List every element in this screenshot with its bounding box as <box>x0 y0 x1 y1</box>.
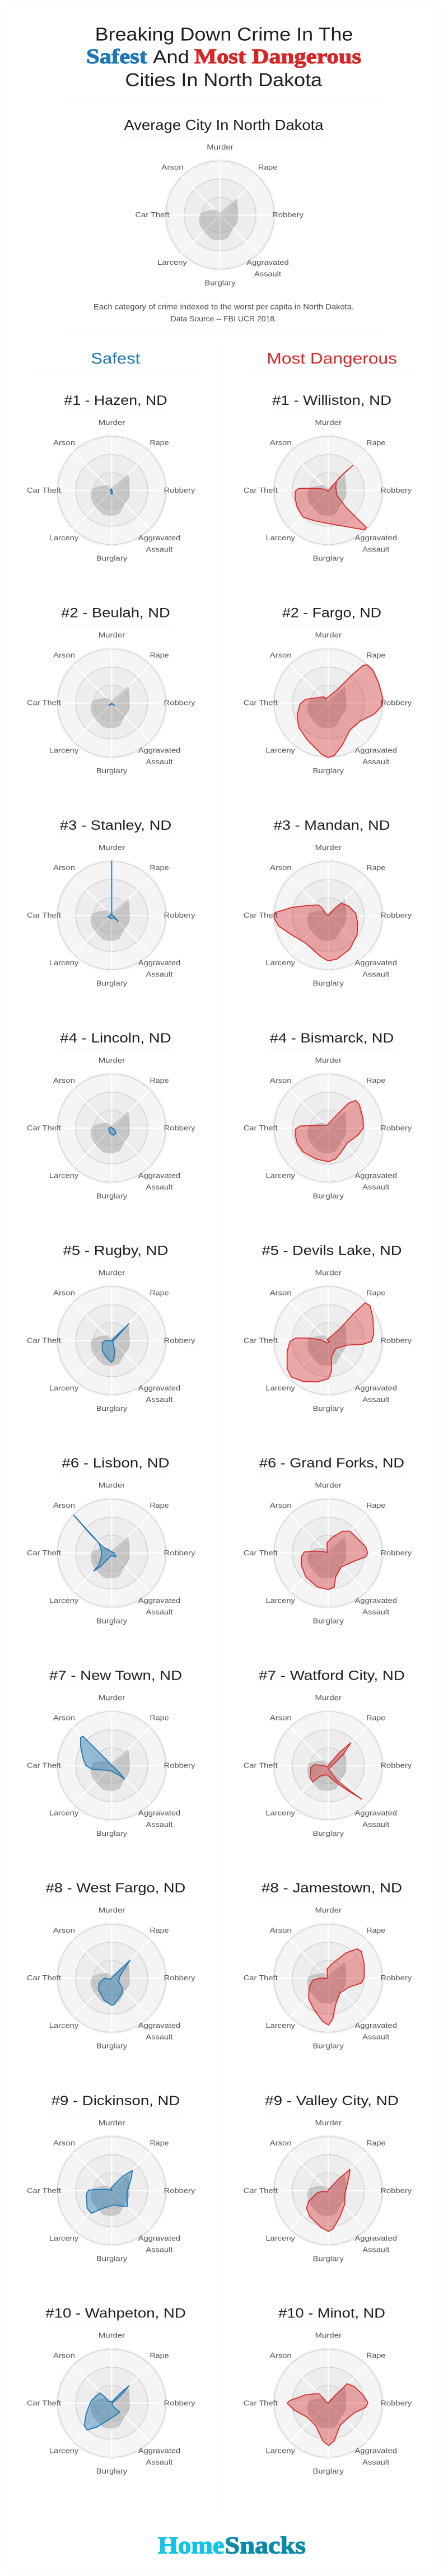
radar chart: Minot: Car Theft <box>244 2399 278 2407</box>
radar chart: Mandan <box>244 844 412 988</box>
radar chart: Devils Lake: Rape <box>366 1289 385 1297</box>
heading: Dickinson: #9 - Dickinson, ND <box>52 2093 180 2109</box>
radar chart: Devils Lake: Aggravated <box>354 1384 397 1392</box>
radar chart: Rugby: Robbery <box>164 1336 195 1344</box>
radar chart: Stanley <box>27 844 195 988</box>
radar chart: Jamestown <box>244 1906 412 2050</box>
radar chart: Williston: Murder <box>315 419 342 427</box>
radar chart: Wahpeton: Arson <box>53 2351 75 2359</box>
title: And <box>153 47 189 68</box>
heading: Lincoln: #4 - Lincoln, ND <box>60 1031 171 1046</box>
radar chart: Rugby: Rape <box>150 1289 169 1297</box>
radar chart: Fargo: Larceny <box>265 747 296 755</box>
radar chart: Beulah: Arson <box>53 652 75 660</box>
radar chart: Beulah: Burglary <box>96 767 128 775</box>
radar chart: New Town: Murder <box>99 1694 125 1702</box>
title: Most Dangerous <box>194 45 361 68</box>
radar chart: Dickinson: Arson <box>53 2139 75 2147</box>
radar chart: Devils Lake <box>244 1269 412 1413</box>
radar chart: Hazen: Aggravated <box>138 534 180 542</box>
radar chart: Fargo: Arson <box>270 652 292 660</box>
radar chart: Grand Forks: Assault <box>362 1608 390 1616</box>
radar chart: Bismarck: Arson <box>270 1077 292 1084</box>
radar chart: Grand Forks: Car Theft <box>244 1549 278 1557</box>
radar chart: Grand Forks: Burglary <box>312 1617 344 1625</box>
radar chart: Dickinson: Aggravated <box>138 2234 180 2242</box>
radar chart: Williston: Car Theft <box>244 487 278 494</box>
radar chart: Hazen: Rape <box>150 439 169 447</box>
radar chart: Watford City <box>244 1694 412 1838</box>
radar chart: Minot <box>244 2331 412 2475</box>
panel: #6 Grand Forks <box>244 1456 412 1625</box>
radar chart: Devils Lake: Arson <box>270 1289 292 1297</box>
radar chart: Mandan: Rape <box>366 864 385 872</box>
radar chart: Stanley: Murder <box>99 844 125 852</box>
radar chart: Dickinson: Assault <box>146 2246 173 2254</box>
radar chart: Beulah: Robbery <box>164 699 195 707</box>
radar chart: average city: Assault <box>254 270 282 278</box>
heading: Beulah: #2 - Beulah, ND <box>61 606 170 621</box>
radar chart: Hazen <box>27 419 195 562</box>
radar chart: Beulah <box>27 632 195 775</box>
radar chart: Devils Lake: Car Theft <box>244 1336 278 1344</box>
heading: New Town: #7 - New Town, ND <box>49 1668 182 1684</box>
radar chart: Wahpeton: Larceny <box>49 2447 79 2455</box>
radar chart: Rugby: Assault <box>146 1396 173 1404</box>
radar chart: Wahpeton: Aggravated <box>138 2447 180 2455</box>
radar chart: West Fargo: Murder <box>99 1906 125 1914</box>
radar chart: West Fargo: Arson <box>53 1927 75 1934</box>
radar chart: Minot: Murder <box>315 2331 342 2339</box>
radar chart: Beulah: Rape <box>150 652 169 660</box>
panel: #7 Watford City <box>244 1668 412 1838</box>
radar chart: New Town: Car Theft <box>27 1762 62 1770</box>
note: data source <box>94 302 354 323</box>
radar chart: Bismarck <box>244 1056 412 1200</box>
heading: Grand Forks: #6 - Grand Forks, ND <box>259 1456 404 1471</box>
radar chart: Watford City: Assault <box>362 1821 390 1829</box>
radar chart: Hazen: Car Theft <box>27 487 62 494</box>
heading: Watford City: #7 - Watford City, ND <box>259 1668 405 1684</box>
radar chart: Mandan: Assault <box>362 971 390 979</box>
radar chart: Fargo: Robbery <box>380 699 412 707</box>
panel: #4 Lincoln <box>27 1031 195 1200</box>
radar chart: average city: Burglary <box>204 279 236 287</box>
radar chart: Minot: Robbery <box>380 2399 412 2407</box>
radar chart: West Fargo: Rape <box>150 1927 169 1934</box>
radar chart: Watford City: Larceny <box>265 1810 296 1817</box>
radar chart: Dickinson <box>27 2119 195 2262</box>
radar chart: Valley City: Car Theft <box>244 2187 278 2195</box>
radar chart: Minot: Larceny <box>265 2447 296 2455</box>
radar chart: Grand Forks: Robbery <box>380 1549 412 1557</box>
radar chart: Lisbon <box>27 1481 195 1625</box>
heading: Fargo: #2 - Fargo, ND <box>282 606 381 621</box>
radar chart: Lincoln: Murder <box>99 1056 125 1064</box>
logo: HomeSnacks: Home <box>158 2533 224 2559</box>
radar chart: average city: Robbery <box>272 211 304 219</box>
radar chart: Williston: Aggravated <box>354 534 397 542</box>
radar chart: Lisbon: Aggravated <box>138 1597 180 1605</box>
heading: Minot: #10 - Minot, ND <box>278 2306 385 2321</box>
radar chart: Williston: Assault <box>362 545 390 553</box>
heading: Valley City: #9 - Valley City, ND <box>265 2093 399 2109</box>
radar chart: Devils Lake: Burglary <box>312 1405 344 1413</box>
radar chart: Valley City: Arson <box>270 2139 292 2147</box>
radar chart: New Town: Arson <box>53 1714 75 1722</box>
radar chart: Lisbon: Car Theft <box>27 1549 62 1557</box>
radar chart: Bismarck: Robbery <box>380 1124 412 1132</box>
panel: #7 New Town <box>27 1668 195 1838</box>
radar chart: Valley City: Rape <box>366 2139 385 2147</box>
radar chart: Williston: Robbery <box>380 487 412 494</box>
panel: #9 Valley City <box>244 2093 412 2262</box>
heading: Bismarck: #4 - Bismarck, ND <box>270 1031 394 1046</box>
radar chart: Lisbon: Robbery <box>164 1549 195 1557</box>
radar chart: average city: Larceny <box>157 259 188 267</box>
radar chart: Wahpeton: Rape <box>150 2351 169 2359</box>
radar chart: average city: Arson <box>161 163 184 171</box>
radar chart: Wahpeton: Car Theft <box>27 2399 62 2407</box>
radar chart: Lisbon: Arson <box>53 1502 75 1509</box>
radar chart: Wahpeton: Murder <box>99 2331 125 2339</box>
radar chart: Devils Lake: Assault <box>362 1396 390 1404</box>
radar chart: Minot: Burglary <box>312 2467 344 2475</box>
radar chart: West Fargo: Aggravated <box>138 2022 180 2030</box>
radar chart: Watford City: Murder <box>315 1694 342 1702</box>
radar chart: Bismarck: Rape <box>366 1077 385 1084</box>
radar chart: Hazen: Larceny <box>49 534 79 542</box>
panel: #6 Lisbon <box>27 1456 195 1625</box>
panel: #1 Williston <box>244 393 412 562</box>
radar chart: Dickinson: Burglary <box>96 2255 128 2262</box>
radar chart: New Town: Larceny <box>49 1810 79 1817</box>
radar chart: Beulah: Larceny <box>49 747 79 755</box>
radar chart: Jamestown: Rape <box>366 1927 385 1934</box>
radar chart: Jamestown: Assault <box>362 2033 390 2041</box>
panel: #5 Rugby <box>27 1243 195 1413</box>
radar chart: Mandan: Arson <box>270 864 292 872</box>
radar chart: Lincoln: Rape <box>150 1077 169 1084</box>
radar chart: Jamestown: Murder <box>315 1906 342 1914</box>
heading: Rugby: #5 - Rugby, ND <box>63 1243 168 1258</box>
radar chart: Rugby <box>27 1269 195 1413</box>
radar chart: Jamestown: Larceny <box>265 2022 296 2030</box>
radar chart: New Town: Rape <box>150 1714 169 1722</box>
radar chart: Lincoln: Burglary <box>96 1192 128 1200</box>
radar chart: Beulah: Assault <box>146 758 173 766</box>
radar chart: Lincoln: Larceny <box>49 1172 79 1180</box>
radar chart: Mandan: Murder <box>315 844 342 852</box>
radar chart: Grand Forks: Larceny <box>265 1597 296 1605</box>
heading: Hazen: #1 - Hazen, ND <box>64 393 167 408</box>
radar chart: Jamestown: Arson <box>270 1927 292 1934</box>
radar chart: Valley City: Larceny <box>265 2234 296 2242</box>
radar chart: Lisbon: Murder <box>99 1481 125 1489</box>
heading: Williston: #1 - Williston, ND <box>272 393 391 408</box>
radar chart: Beulah: Car Theft <box>27 699 62 707</box>
radar chart: Watford City: Car Theft <box>244 1762 278 1770</box>
radar chart: Williston: Arson <box>270 439 292 447</box>
radar chart: Valley City: Assault <box>362 2246 390 2254</box>
radar chart: Mandan: Car Theft <box>244 911 278 919</box>
radar chart: Rugby: Car Theft <box>27 1336 62 1344</box>
radar chart: Lincoln: Car Theft <box>27 1124 62 1132</box>
radar chart: Stanley: Burglary <box>96 980 128 988</box>
radar chart: Minot: Assault <box>362 2458 390 2466</box>
radar chart: Mandan: Robbery <box>380 911 412 919</box>
radar chart: Devils Lake: Robbery <box>380 1336 412 1344</box>
radar chart: average city: Car Theft <box>136 211 170 219</box>
radar chart: New Town: Burglary <box>96 1830 128 1838</box>
radar chart: Valley City: Burglary <box>312 2255 344 2262</box>
radar chart: Jamestown: Car Theft <box>244 1974 278 1982</box>
heading: most dangerous column: Most Dangerous <box>267 350 397 367</box>
radar chart: average city <box>136 143 304 287</box>
radar chart: Williston <box>244 419 412 562</box>
logo: HomeSnacks: Snacks <box>225 2533 306 2559</box>
radar chart: Fargo <box>244 632 412 775</box>
radar chart: Lincoln: Aggravated <box>138 1172 180 1180</box>
radar chart: Jamestown: Robbery <box>380 1974 412 1982</box>
panel: #9 Dickinson <box>27 2093 195 2262</box>
heading: Devils Lake: #5 - Devils Lake, ND <box>262 1243 402 1258</box>
radar chart: Watford City: Arson <box>270 1714 292 1722</box>
logo: HomeSnacks <box>158 2533 306 2559</box>
heading: Jamestown: #8 - Jamestown, ND <box>262 1881 402 1896</box>
heading: West Fargo: #8 - West Fargo, ND <box>46 1881 185 1896</box>
radar chart: Stanley: Larceny <box>49 959 79 967</box>
heading: Mandan: #3 - Mandan, ND <box>273 818 390 833</box>
panel: #8 West Fargo <box>27 1881 195 2050</box>
heading: average city: Average City In North Dakota <box>124 116 324 133</box>
radar chart: Stanley: Aggravated <box>138 959 180 967</box>
radar chart: Rugby: Murder <box>99 1269 125 1277</box>
radar chart: Fargo: Car Theft <box>244 699 278 707</box>
panel: #2 Fargo <box>244 606 412 775</box>
radar chart: Grand Forks <box>244 1481 412 1625</box>
radar chart: Bismarck: Murder <box>315 1056 342 1064</box>
radar chart: Rugby: Burglary <box>96 1405 128 1413</box>
radar chart: Valley City: Robbery <box>380 2187 412 2195</box>
radar chart: Rugby: Larceny <box>49 1384 79 1392</box>
radar chart: Beulah: Murder <box>99 632 125 639</box>
radar chart: Fargo: Murder <box>315 632 342 639</box>
radar chart: Bismarck: Larceny <box>265 1172 296 1180</box>
radar chart: Hazen: Murder <box>99 419 125 427</box>
radar chart: Stanley: Arson <box>53 864 75 872</box>
radar chart: Hazen: Burglary <box>96 554 128 562</box>
radar chart: Hazen: Robbery <box>164 487 195 494</box>
title <box>86 24 361 91</box>
panel: #3 Mandan <box>244 818 412 988</box>
radar chart: Lisbon: Larceny <box>49 1597 79 1605</box>
radar chart: Bismarck: Car Theft <box>244 1124 278 1132</box>
radar chart: Grand Forks: Rape <box>366 1502 385 1509</box>
panel: #4 Bismarck <box>244 1031 412 1200</box>
radar chart: average city: Rape <box>258 163 277 171</box>
radar chart: average city: Aggravated <box>246 259 289 267</box>
radar chart: Mandan: Aggravated <box>354 959 397 967</box>
panel: #1 Hazen <box>27 393 195 562</box>
radar chart: West Fargo: Car Theft <box>27 1974 62 1982</box>
radar chart: Fargo: Assault <box>362 758 390 766</box>
radar chart: Fargo: Rape <box>366 652 385 660</box>
radar chart: Bismarck: Aggravated <box>354 1172 397 1180</box>
radar chart: Valley City: Murder <box>315 2119 342 2127</box>
radar chart: Lincoln: Robbery <box>164 1124 195 1132</box>
radar chart: Wahpeton: Burglary <box>96 2467 128 2475</box>
heading: Lisbon: #6 - Lisbon, ND <box>62 1456 169 1471</box>
radar chart: Minot: Aggravated <box>354 2447 397 2455</box>
radar chart: Rugby: Aggravated <box>138 1384 180 1392</box>
radar chart: Lisbon: Assault <box>146 1608 173 1616</box>
radar chart: West Fargo <box>27 1906 195 2050</box>
radar chart: Bismarck: Assault <box>362 1183 390 1191</box>
radar chart: Hazen: Arson <box>53 439 75 447</box>
radar chart: New Town: Robbery <box>164 1762 195 1770</box>
radar chart: Dickinson: Rape <box>150 2139 169 2147</box>
radar chart: Beulah: Aggravated <box>138 747 180 755</box>
radar chart: Grand Forks: Aggravated <box>354 1597 397 1605</box>
heading: Stanley: #3 - Stanley, ND <box>60 818 171 833</box>
radar chart: Lincoln: Assault <box>146 1183 173 1191</box>
radar chart: West Fargo: Burglary <box>96 2042 128 2050</box>
heading: safest column: Safest <box>91 350 141 367</box>
radar chart: Dickinson: Larceny <box>49 2234 79 2242</box>
radar chart: Devils Lake: Larceny <box>265 1384 296 1392</box>
radar chart: Bismarck: Burglary <box>312 1192 344 1200</box>
radar chart: Stanley: Assault <box>146 971 173 979</box>
radar chart: Wahpeton: Robbery <box>164 2399 195 2407</box>
radar chart: Grand Forks: Arson <box>270 1502 292 1509</box>
radar chart: Lisbon: Burglary <box>96 1617 128 1625</box>
radar chart: Wahpeton: Assault <box>146 2458 173 2466</box>
radar chart: Lincoln <box>27 1056 195 1200</box>
radar chart: Stanley: Car Theft <box>27 911 62 919</box>
radar chart: Watford City: Aggravated <box>354 1810 397 1817</box>
heading: Wahpeton: #10 - Wahpeton, ND <box>45 2306 186 2321</box>
radar chart: Grand Forks: Murder <box>315 1481 342 1489</box>
title: Breaking Down Crime In The <box>95 24 353 45</box>
radar chart: Watford City: Burglary <box>312 1830 344 1838</box>
radar chart: Jamestown: Burglary <box>312 2042 344 2050</box>
radar chart: Fargo: Aggravated <box>354 747 397 755</box>
radar chart: Dickinson: Murder <box>99 2119 125 2127</box>
radar chart: Stanley: Rape <box>150 864 169 872</box>
radar chart: Dickinson: Car Theft <box>27 2187 62 2195</box>
panel: #8 Jamestown <box>244 1881 412 2050</box>
radar chart: Williston: Larceny <box>265 534 296 542</box>
panel: average city <box>94 116 354 323</box>
note: data source: Data Source -- FBI UCR 2018. <box>171 314 277 323</box>
panel: #5 Devils Lake <box>244 1243 412 1413</box>
radar chart: Lincoln: Arson <box>53 1077 75 1084</box>
title: Cities In North Dakota <box>125 70 322 91</box>
radar chart: Mandan: Burglary <box>312 980 344 988</box>
radar chart: Minot: Arson <box>270 2351 292 2359</box>
radar chart: West Fargo: Robbery <box>164 1974 195 1982</box>
radar chart: New Town: Aggravated <box>138 1810 180 1817</box>
radar chart: Williston: Burglary <box>312 554 344 562</box>
panel: #3 Stanley <box>27 818 195 988</box>
radar chart: Jamestown: Aggravated <box>354 2022 397 2030</box>
radar chart: Minot: Rape <box>366 2351 385 2359</box>
radar chart: average city: Murder <box>207 143 234 151</box>
title: Safest <box>86 45 148 68</box>
panel: #2 Beulah <box>27 606 195 775</box>
radar chart: West Fargo: Larceny <box>49 2022 79 2030</box>
radar chart: Mandan: Larceny <box>265 959 296 967</box>
note: data source: Each category of crime indexed to the worst per capita in North Dakota. <box>94 302 354 311</box>
radar chart: Dickinson: Robbery <box>164 2187 195 2195</box>
radar chart: New Town: Assault <box>146 1821 173 1829</box>
radar chart: Valley City <box>244 2119 412 2262</box>
radar chart: West Fargo: Assault <box>146 2033 173 2041</box>
radar chart: Watford City: Rape <box>366 1714 385 1722</box>
radar chart: Wahpeton <box>27 2331 195 2475</box>
radar chart: Williston: Rape <box>366 439 385 447</box>
radar chart: Watford City: Robbery <box>380 1762 412 1770</box>
panel: #10 Minot <box>244 2306 412 2475</box>
radar chart: Hazen: Assault <box>146 545 173 553</box>
radar chart: Stanley: Robbery <box>164 911 195 919</box>
radar chart: Devils Lake: Murder <box>315 1269 342 1277</box>
panel: #10 Wahpeton <box>27 2306 195 2475</box>
radar chart: New Town <box>27 1694 195 1838</box>
radar chart: Fargo: Burglary <box>312 767 344 775</box>
radar chart: Rugby: Arson <box>53 1289 75 1297</box>
radar chart: Lisbon: Rape <box>150 1502 169 1509</box>
radar chart: Valley City: Aggravated <box>354 2234 397 2242</box>
